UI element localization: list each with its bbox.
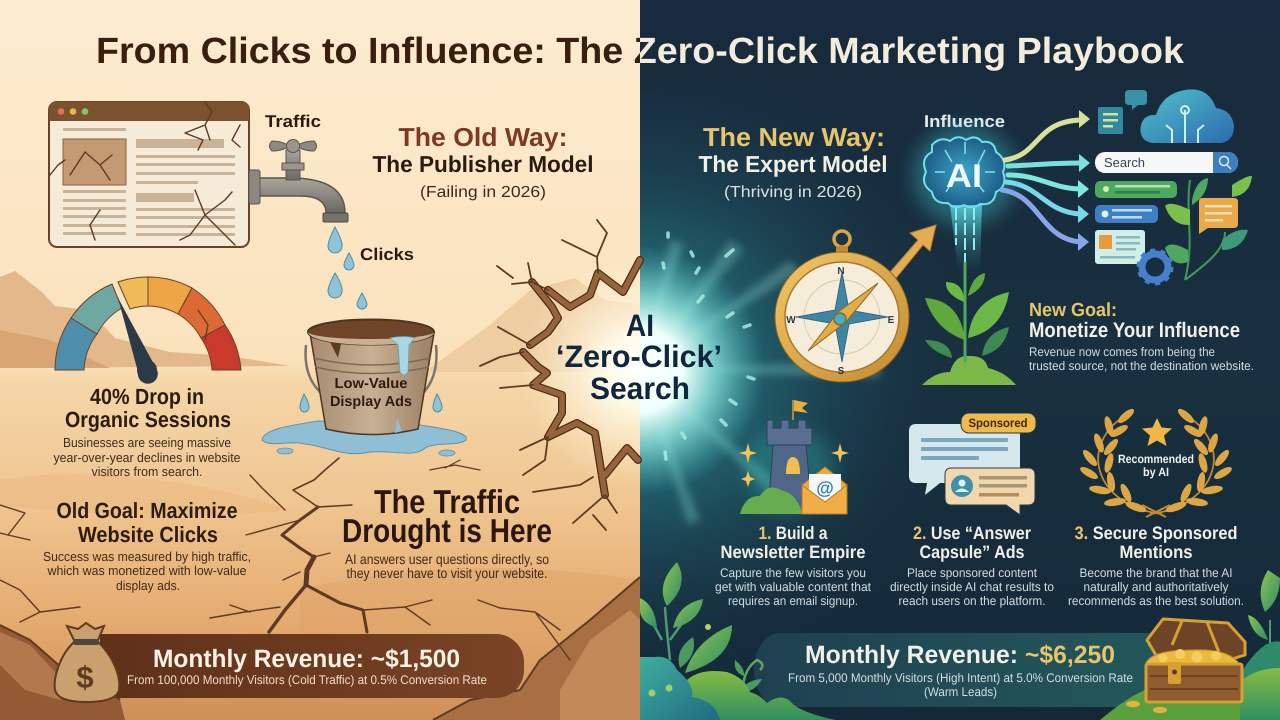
new goal: trusted source, not the destination website. <box>1029 359 1254 373</box>
icon: money bag <box>55 623 119 702</box>
new goal <box>1029 300 1254 373</box>
panel: new way background <box>640 0 1280 720</box>
panel: old way background <box>0 0 640 720</box>
heading and body: answer capsule: 2. Use “Answer <box>913 523 1031 543</box>
old goal: which was monetized with low-value <box>47 563 246 578</box>
new goal: Monetize Your Influence <box>1029 319 1240 342</box>
heading and body: sponsored mentions: recommends as the best solution. <box>1068 594 1244 608</box>
icon: recommended by AI laurel <box>1078 407 1234 517</box>
new revenue bar: Monthly Revenue: ~$6,250 <box>805 641 1115 669</box>
heading and body: answer capsule: reach users on the platform. <box>898 594 1046 608</box>
icon: plant with leaves <box>1165 176 1252 280</box>
icon: recommended by AI laurel: Recommended <box>1118 452 1194 466</box>
icon: recommended by AI laurel: by AI <box>1143 465 1169 479</box>
chart: organic traffic gauge <box>55 277 241 384</box>
stat: 40% drop: Organic Sessions <box>65 407 231 432</box>
cracks near center <box>480 220 640 530</box>
label: clicks: Clicks <box>360 245 414 264</box>
foliage: bottom left <box>640 562 835 720</box>
heading and body: build newsletter <box>715 523 872 608</box>
old goal: Website Clicks <box>78 522 218 547</box>
heading: the old way <box>372 122 594 201</box>
icon: compass with arrow: E <box>888 315 895 326</box>
heading: the new way <box>698 122 888 201</box>
bottom rocks: left <box>0 625 125 720</box>
icon: chat bubble small <box>1125 90 1147 110</box>
result: card <box>1095 230 1145 264</box>
old revenue bar <box>100 634 524 698</box>
icon: treasure chest <box>1126 619 1245 713</box>
puddle <box>262 421 466 456</box>
arrows: AI to channels <box>1002 110 1090 251</box>
heading and body: answer capsule: directly inside AI chat results to <box>890 580 1054 594</box>
icon: newsletter tower: @ <box>816 478 834 498</box>
heading: the old way: The Publisher Model <box>372 151 594 177</box>
icon: AI brain <box>913 125 1017 225</box>
traffic drought: AI answers user questions directly, so <box>345 551 549 567</box>
icon: answer capsule chat: Sponsored <box>968 416 1028 430</box>
icon: AI brain: AI <box>946 157 982 194</box>
traffic drought: Drought is Here <box>342 512 552 549</box>
heading: the new way: (Thriving in 2026) <box>724 184 862 201</box>
heading: the new way: The Expert Model <box>698 151 888 177</box>
old goal <box>43 498 251 593</box>
icon: cloud <box>1140 89 1234 143</box>
heading and body: build newsletter: requires an email signup. <box>728 594 858 608</box>
stat: 40% drop: visitors from search. <box>92 464 202 479</box>
icon: compass with arrow <box>775 225 936 382</box>
center label: AI zero-click search <box>556 308 722 406</box>
icon: compass with arrow: N <box>837 266 845 277</box>
new revenue bar <box>754 633 1235 707</box>
icon: newsletter tower <box>739 400 849 514</box>
center label: AI zero-click search: AI <box>626 308 654 343</box>
label: influence: Influence <box>924 112 1005 131</box>
heading and body: sponsored mentions <box>1068 523 1244 608</box>
old goal: Success was measured by high traffic, <box>43 549 251 564</box>
center glow and rays <box>510 233 880 525</box>
icon: leaky bucket: Display Ads <box>330 394 412 410</box>
old revenue bar: From 100,000 Monthly Visitors (Cold Traffic) at 0.5% Conversion Rate <box>127 673 487 687</box>
search bar: Search <box>1104 155 1145 170</box>
heading: the old way: The Old Way: <box>398 122 568 152</box>
heading and body: build newsletter: get with valuable content that <box>715 580 872 594</box>
heading and body: sponsored mentions: 3. Secure Sponsored <box>1074 523 1238 543</box>
heading and body: sponsored mentions: Become the brand that the AI <box>1080 566 1232 580</box>
title: From Clicks to Influence: The Zero-Click Marketing Playbook <box>96 30 1185 71</box>
stat: 40% drop: 40% Drop in <box>90 384 204 409</box>
old goal: Old Goal: Maximize <box>56 498 238 523</box>
foliage: bottom right <box>1100 570 1280 720</box>
icon: sprout <box>922 262 1016 385</box>
heading and body: build newsletter: Newsletter Empire <box>720 542 866 562</box>
new revenue bar: (Warm Leads) <box>924 685 997 699</box>
icon: gear <box>1138 250 1172 284</box>
stat: 40% drop: year-over-year declines in website <box>54 450 240 465</box>
center label: AI zero-click search: ‘Zero-Click’ <box>556 339 722 374</box>
icon: leaky bucket: Low-Value <box>334 376 408 392</box>
heading: the old way: (Failing in 2026) <box>420 184 546 201</box>
icon: compass with arrow: W <box>786 315 796 326</box>
heading and body: build newsletter: 1. Build a <box>758 523 828 543</box>
search bar <box>1095 152 1238 173</box>
icon: water drops <box>300 227 442 412</box>
bottom rocks: right <box>433 577 640 720</box>
result: blue bar <box>1095 205 1158 223</box>
heading and body: sponsored mentions: Mentions <box>1120 542 1192 562</box>
new goal: New Goal: <box>1029 300 1117 321</box>
traffic drought <box>342 483 552 581</box>
icon: faucet <box>249 140 348 222</box>
traffic drought: they never have to visit your website. <box>346 565 548 581</box>
illustration: cracked browser window <box>49 102 249 247</box>
heading and body: answer capsule <box>890 523 1054 608</box>
heading and body: build newsletter: Capture the few visitors you <box>720 566 866 580</box>
icon: orange speech bubble <box>1199 198 1238 234</box>
ground cracks <box>0 458 570 660</box>
icon: leaky bucket <box>306 320 436 434</box>
light beam <box>950 205 982 270</box>
old goal: display ads. <box>116 578 180 593</box>
icon: money bag: $ <box>76 660 94 695</box>
result: green bar <box>1095 181 1177 198</box>
icon: document <box>1098 107 1123 134</box>
stat: 40% drop <box>54 384 240 479</box>
old revenue bar: Monthly Revenue: ~$1,500 <box>153 645 460 673</box>
icon: answer capsule chat <box>909 413 1036 515</box>
new revenue bar: From 5,000 Monthly Visitors (High Intent) at 5.0% Conversion Rate <box>788 671 1133 685</box>
stat: 40% drop: Businesses are seeing massive <box>63 435 231 450</box>
heading and body: answer capsule: Place sponsored content <box>907 566 1037 580</box>
heading: the new way: The New Way: <box>703 122 885 152</box>
label: traffic: Traffic <box>265 112 321 131</box>
icon: compass with arrow: S <box>838 366 845 377</box>
traffic drought: The Traffic <box>374 483 520 520</box>
new goal: Revenue now comes from being the <box>1029 345 1215 359</box>
heading and body: sponsored mentions: naturally and authoritatively <box>1084 580 1229 594</box>
heading and body: answer capsule: Capsule” Ads <box>920 542 1024 562</box>
center label: AI zero-click search: Search <box>590 371 690 406</box>
